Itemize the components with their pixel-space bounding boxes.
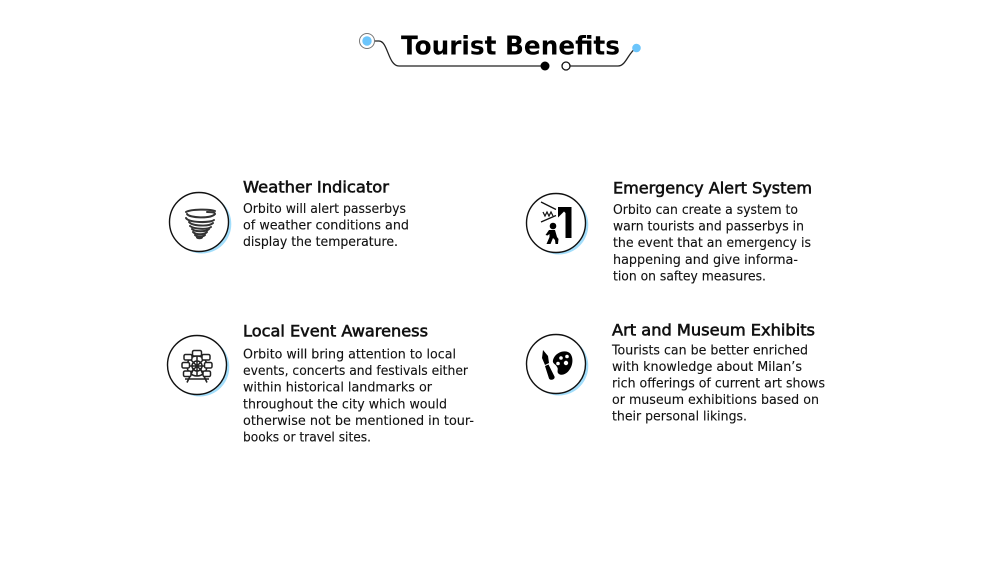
text block: throughout the city which would (243, 398, 447, 412)
text block: display the temperature. (243, 235, 398, 250)
panel: local event awareness (168, 322, 474, 446)
text block (243, 202, 409, 250)
text block: their personal likings. (612, 410, 747, 424)
title: Tourist Benefits (401, 32, 620, 62)
text block: with knowledge about Milan’s (612, 360, 802, 375)
text block: events, concerts and festivals either (243, 364, 469, 379)
text block: Orbito will alert passerbys (243, 202, 406, 217)
icon: palette and paintbrush (526, 334, 588, 396)
title connector decoration (360, 34, 641, 70)
heading: Emergency Alert System (613, 178, 812, 198)
text block: or museum exhibitions based on (612, 393, 819, 408)
text block: happening and give informa- (613, 253, 798, 268)
text block: within historical landmarks or (243, 380, 433, 396)
text block (611, 344, 825, 424)
text block (613, 203, 811, 284)
panel: art and museum exhibits (526, 320, 825, 424)
text block: otherwise not be mentioned in tour- (243, 414, 474, 429)
icon: emergency siren and walking person (526, 194, 588, 254)
text block (243, 348, 474, 446)
text block: warn tourists and passerbys in (613, 220, 804, 234)
icon: tornado (170, 192, 231, 254)
text block: Orbito can create a system to (613, 203, 798, 218)
text block: Tourists can be better enriched (611, 344, 808, 358)
text block: books or travel sites. (243, 430, 371, 446)
text block: Orbito will bring attention to local (243, 348, 456, 362)
panel: weather indicator (170, 178, 409, 254)
heading: Local Event Awareness (243, 322, 428, 340)
heading: Weather Indicator (243, 178, 389, 196)
text block: of weather conditions and (243, 218, 409, 234)
text block: the event that an emergency is (613, 236, 811, 251)
icon: ferris wheel (168, 336, 229, 396)
panel: emergency alert system (526, 178, 812, 284)
text block: tion on saftey measures. (613, 270, 766, 284)
text block: rich offerings of current art shows (612, 376, 825, 392)
heading: Art and Museum Exhibits (612, 320, 815, 340)
